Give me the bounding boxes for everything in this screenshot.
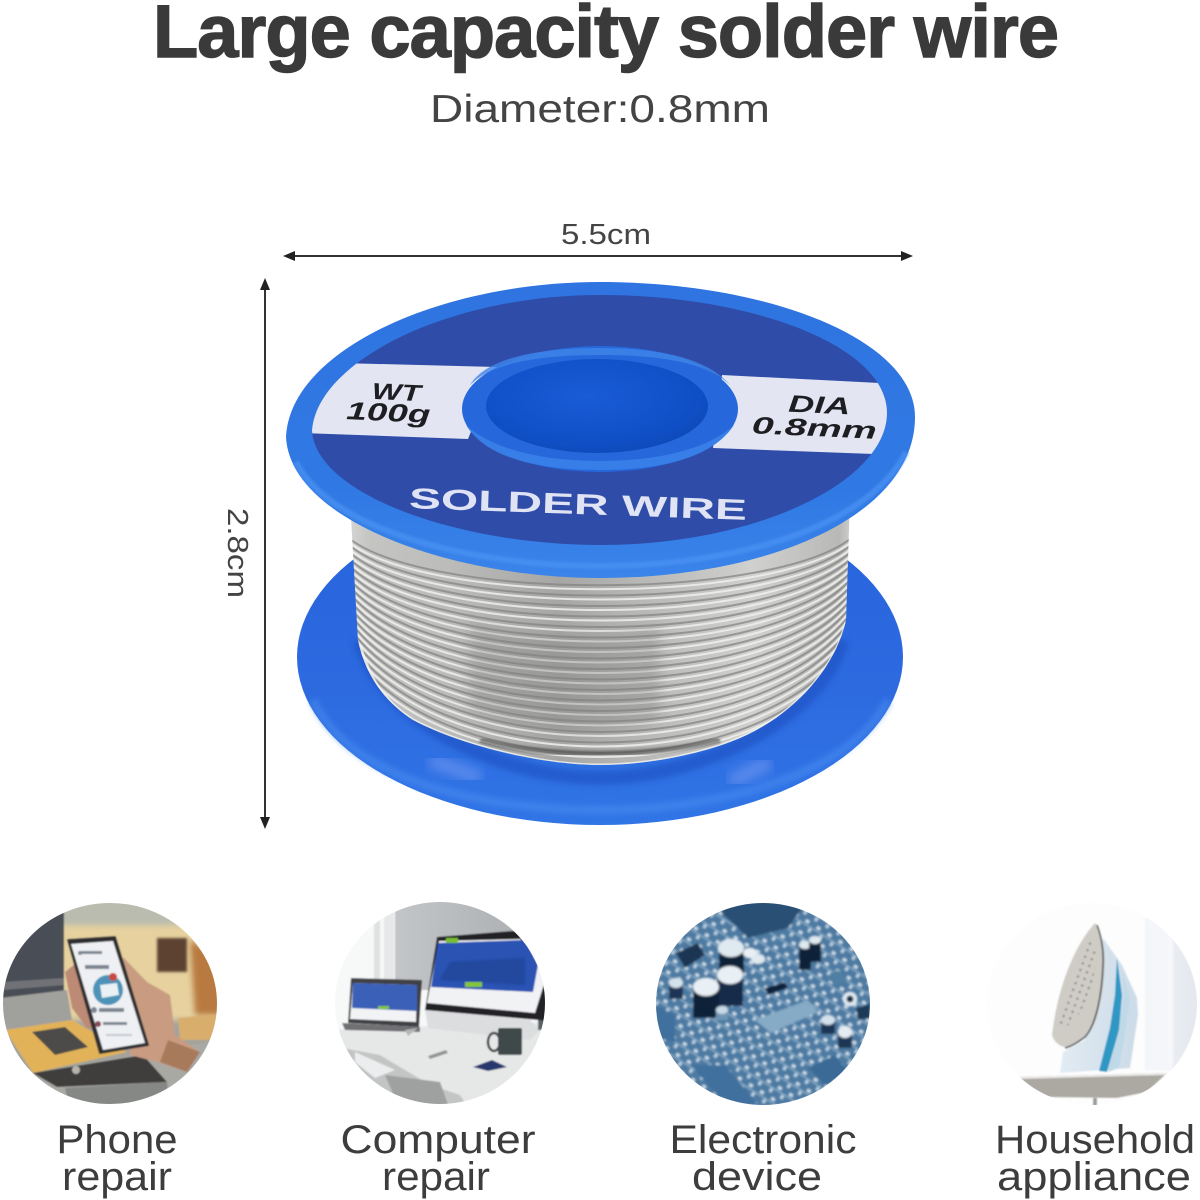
white bands — [300, 362, 900, 455]
application: household appliance — [998, 918, 1197, 1198]
width dimension arrow — [283, 251, 913, 261]
caption — [995, 1118, 1195, 1199]
label text: WT 100g — [346, 378, 431, 429]
label face — [312, 295, 887, 545]
caption: appliance — [997, 1155, 1191, 1199]
bottom flange — [297, 489, 903, 825]
caption: repair — [382, 1155, 490, 1199]
wire coil — [351, 518, 850, 765]
top flange — [286, 282, 915, 578]
label text: solder wire: SOLDER WIRE — [409, 483, 747, 527]
application: phone repair — [0, 900, 225, 1199]
subtitle: diameter: Diameter:0.8mm — [430, 88, 770, 131]
hub — [462, 346, 738, 472]
application: electronic device — [650, 900, 875, 1199]
height dimension arrow — [260, 278, 270, 829]
caption — [56, 1118, 178, 1199]
solder wire spool — [286, 282, 915, 825]
width label: 5.5cm — [561, 219, 651, 251]
label text: DIA 0.8mm: 0.8mm — [751, 412, 877, 445]
caption: Household — [995, 1118, 1195, 1162]
label text: DIA 0.8mm — [751, 391, 877, 445]
height label: 2.8cm — [221, 508, 253, 598]
caption — [670, 1118, 856, 1199]
caption: Electronic — [670, 1118, 856, 1162]
caption: device — [692, 1155, 822, 1199]
photo: circuit board — [650, 900, 875, 1110]
caption: repair — [62, 1155, 172, 1199]
application: computer repair — [330, 900, 550, 1199]
caption — [340, 1118, 536, 1199]
label text: WT 100g: WT — [371, 378, 424, 406]
photo: laptop and monitor on desk — [330, 900, 550, 1110]
photo: clothes iron — [1020, 918, 1197, 1105]
caption: Phone — [56, 1118, 178, 1162]
label text: WT 100g: 100g — [346, 397, 431, 429]
label text: DIA 0.8mm: DIA — [788, 391, 851, 420]
photo: hand holding phone — [0, 900, 225, 1110]
caption: Computer — [340, 1118, 536, 1162]
